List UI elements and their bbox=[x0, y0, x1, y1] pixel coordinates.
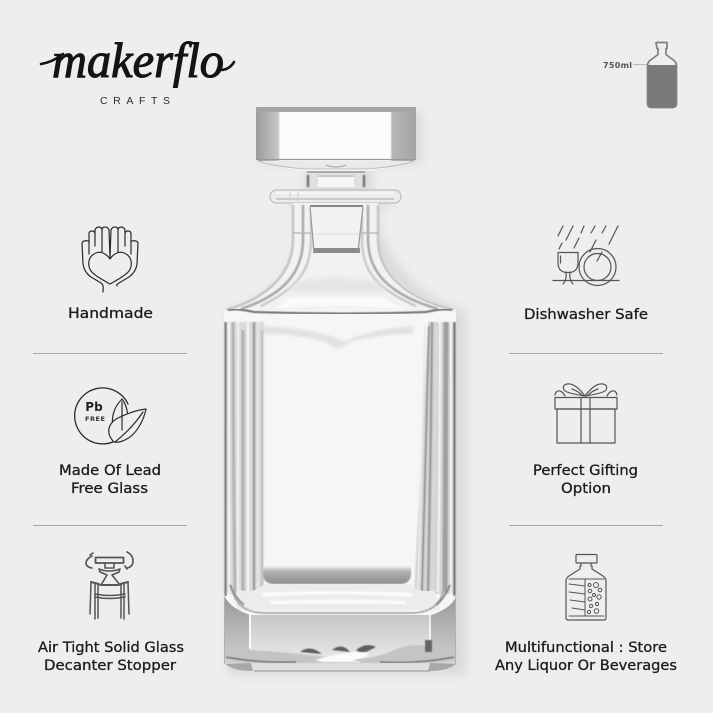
grey reflection under shoulder bbox=[262, 326, 414, 348]
feature: lead free bbox=[59, 388, 161, 497]
solid base corner right bbox=[431, 597, 456, 670]
base refractions bbox=[226, 645, 456, 663]
solid base centre bbox=[251, 615, 431, 665]
icon: gift box bbox=[555, 384, 617, 443]
icon: pb free with leaves: FREE bbox=[85, 415, 105, 423]
icon: decanter with contents bbox=[566, 554, 606, 620]
label: made of lead free glass bbox=[59, 463, 161, 497]
icon: stopper on decanter bbox=[86, 552, 133, 619]
feature: air tight stopper bbox=[38, 552, 184, 674]
logo swashes bbox=[41, 54, 234, 70]
decanter shadow bbox=[228, 112, 466, 675]
right fluting bbox=[414, 322, 456, 596]
label: air tight stopper bbox=[38, 640, 184, 674]
icon: dishes under water spray bbox=[553, 226, 619, 286]
feature: handmade bbox=[68, 227, 153, 322]
icon: pb free with leaves: Pb bbox=[85, 400, 103, 414]
stopper stem bbox=[307, 172, 365, 188]
volume indicator: 750ml bottle bbox=[603, 42, 676, 108]
stopper cap bbox=[256, 107, 416, 171]
label: multifunctional: Any Liquor Or Beverages bbox=[495, 658, 677, 674]
decanter body bbox=[224, 309, 456, 671]
label: made of lead free glass: Free Glass bbox=[71, 481, 148, 497]
label: perfect gifting option: Option bbox=[561, 481, 611, 497]
inner bottom grey band bbox=[263, 566, 411, 584]
label: made of lead free glass: Made Of Lead bbox=[59, 463, 161, 479]
label: multifunctional: Multifunctional : Store bbox=[505, 640, 667, 656]
solid base corner left bbox=[225, 597, 251, 670]
label: dishwasher safe: Dishwasher Safe bbox=[524, 307, 648, 323]
logo subtitle: CRAFTS bbox=[100, 95, 170, 107]
label: air tight stopper: Air Tight Solid Glass bbox=[38, 640, 184, 656]
label: multifunctional bbox=[495, 640, 677, 674]
feature: perfect gifting bbox=[533, 384, 638, 497]
logo: makerflo crafts bbox=[41, 32, 234, 107]
feature: multifunctional bbox=[495, 554, 677, 674]
logo wordmark: makerflo bbox=[52, 32, 224, 88]
shoulder rim line bbox=[228, 309, 452, 314]
left fluting bbox=[226, 322, 264, 596]
bottle silhouette bbox=[648, 42, 676, 108]
icon: hands holding heart bbox=[82, 227, 138, 292]
decanter photo bbox=[224, 107, 466, 675]
feature: dishwasher safe bbox=[524, 226, 648, 323]
inner floor highlight bbox=[236, 584, 440, 610]
divider left 2 bbox=[33, 524, 187, 526]
neck collar bbox=[270, 190, 401, 203]
divider right 2 bbox=[509, 524, 663, 526]
divider left 1 bbox=[33, 352, 187, 354]
label: handmade: Handmade bbox=[68, 306, 153, 322]
divider right 1 bbox=[509, 352, 663, 354]
volume label: 750ml bbox=[603, 61, 632, 70]
label: perfect gifting option: Perfect Gifting bbox=[533, 463, 638, 479]
icon: pb free with leaves bbox=[75, 388, 146, 444]
label: air tight stopper: Decanter Stopper bbox=[44, 658, 176, 674]
label: perfect gifting option bbox=[533, 463, 638, 497]
shoulders and neck bbox=[224, 203, 456, 319]
stopper plug bbox=[310, 206, 363, 253]
